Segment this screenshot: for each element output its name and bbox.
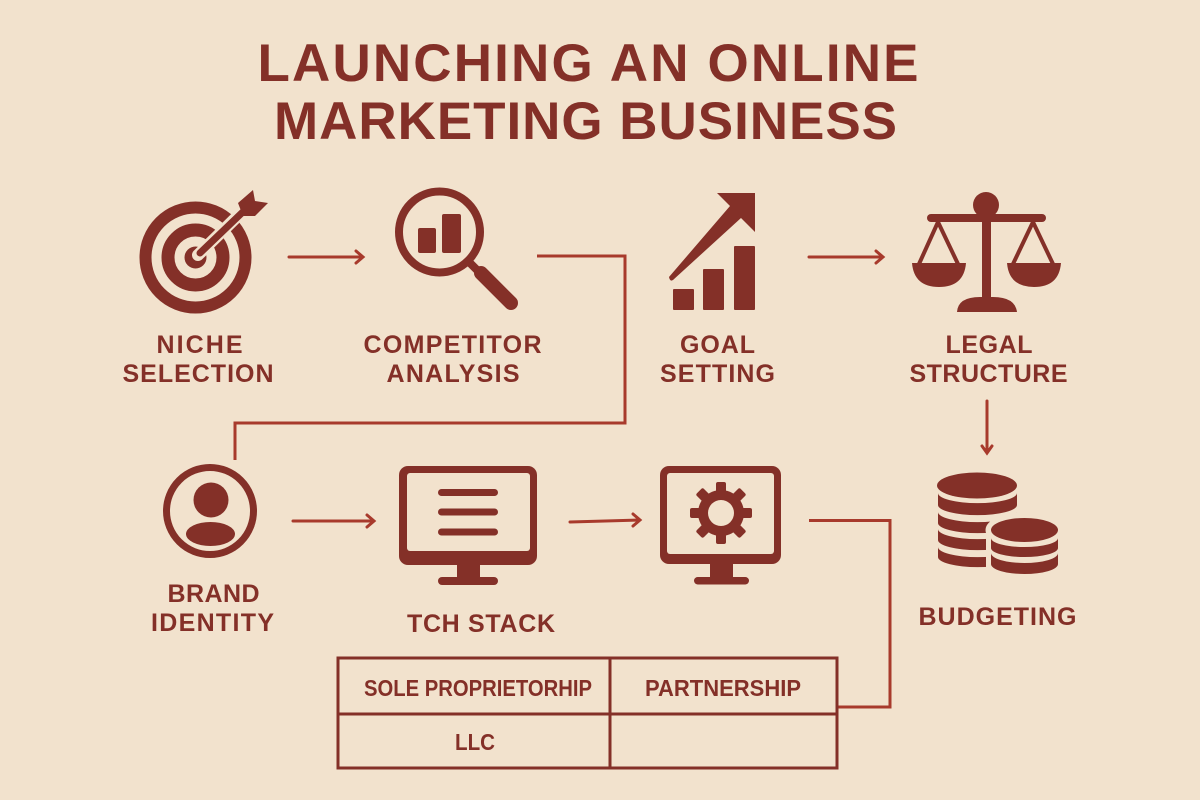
label: niche selection: SELECTION [122,360,274,388]
label: tch stack: TCH STACK [407,610,555,638]
label: brand identity: BRAND [168,580,260,608]
label: brand identity: IDENTITY [151,609,274,637]
label: budgeting: BUDGETING [918,603,1076,631]
icon: brand identity [166,468,254,554]
label: competitor analysis: COMPETITOR [364,331,542,359]
icon: coin stacks [937,472,1064,580]
arrow: goal to legal [809,251,883,263]
connector: settings to table [809,520,890,707]
label: legal structure [910,331,1068,388]
arrow: legal to budgeting [982,401,992,453]
label: goal setting: GOAL [680,331,755,359]
table: legal structures: SOLE PROPRIETORHIP [364,675,592,701]
label: niche selection [122,331,274,388]
title: LAUNCHING AN ONLINE [258,34,918,93]
table: legal structures: PARTNERSHIP [645,675,801,701]
icon: magnifier with bars [399,192,511,303]
table: legal structures: LLC [455,729,495,755]
icon: growth chart [669,193,755,310]
icon: monitor with text lines [399,466,537,585]
label: goal setting [660,331,775,388]
title: MARKETING BUSINESS [274,92,897,151]
arrow: brand to tech stack [293,515,374,527]
label: niche selection: NICHE [156,331,242,359]
label: legal structure: STRUCTURE [910,360,1068,388]
connector: competitor to brand [235,256,625,460]
title [258,34,918,151]
icon: monitor with gear [660,466,781,584]
label: legal structure: LEGAL [946,331,1032,359]
arrow: niche to competitor [289,251,363,263]
table: legal structures [338,658,837,768]
label: competitor analysis [364,331,542,388]
label: competitor analysis: ANALYSIS [386,360,520,388]
label: brand identity [151,580,274,637]
arrow: tech stack to settings [570,514,640,526]
label: goal setting: SETTING [660,360,775,388]
icon: scales [912,192,1061,312]
icon: target with arrow [146,190,268,308]
